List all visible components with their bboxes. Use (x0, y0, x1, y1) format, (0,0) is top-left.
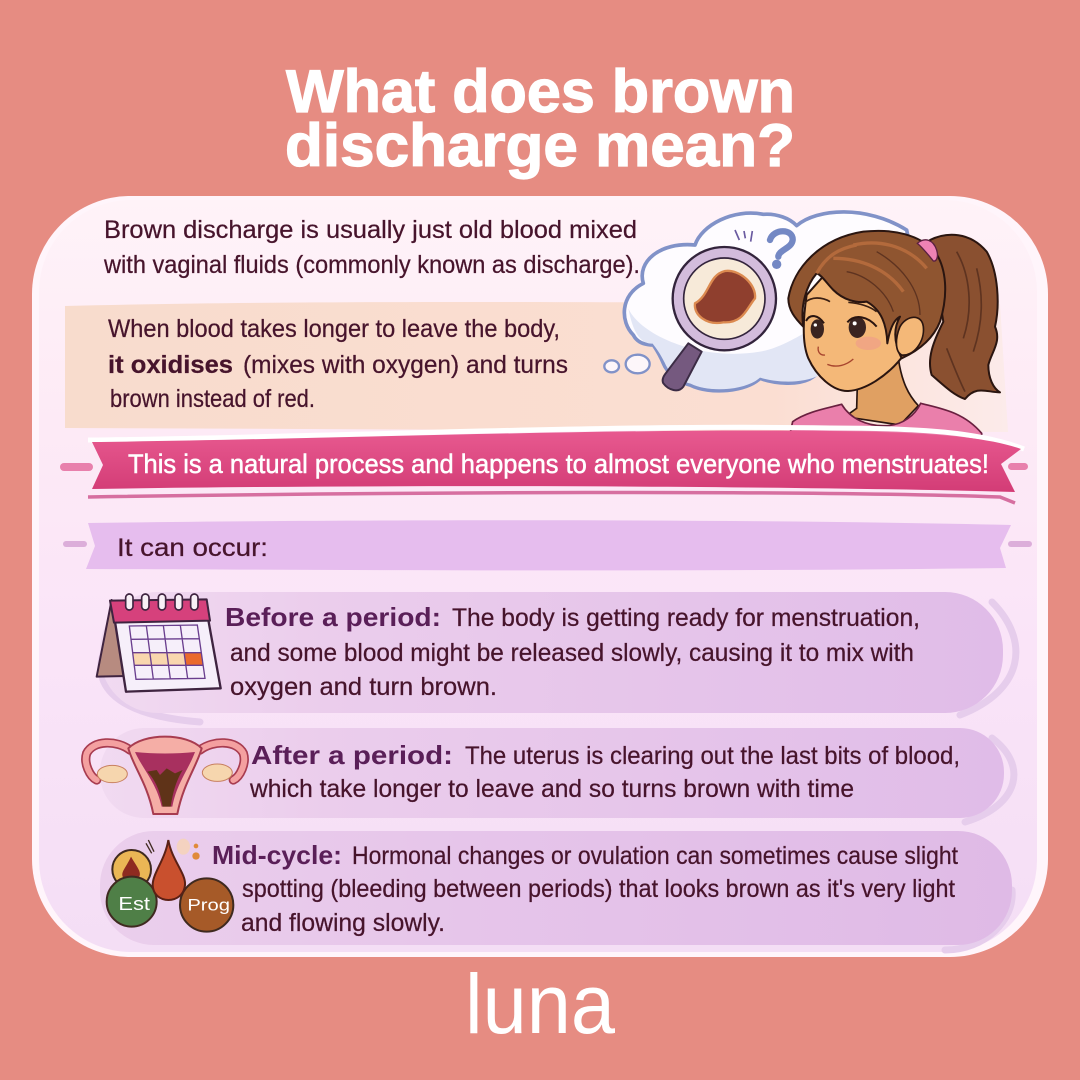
before a period text: and some blood might be released slowly, causing it to mix with (230, 639, 914, 667)
oxidation text: brown instead of red. (110, 385, 315, 413)
ear (896, 317, 923, 355)
mid-cycle text: and flowing slowly. (241, 909, 445, 937)
mid-cycle text: spotting (bleeding between periods) that looks brown as it's very light (242, 875, 955, 903)
row: after a period (86, 728, 1004, 818)
ponytail (930, 235, 1000, 399)
intro text (103, 216, 640, 279)
oxidation text: When blood takes longer to leave the body, (108, 315, 560, 343)
row: before a period (97, 592, 1003, 713)
shirt (787, 403, 982, 448)
eyes (811, 319, 824, 339)
section header: it can occur (63, 520, 1032, 570)
row crescents (101, 602, 1016, 950)
cheek and smile (856, 337, 881, 350)
icon: uterus (86, 737, 244, 814)
before a period text: Before a period: (225, 602, 441, 632)
before a period text: oxygen and turn brown. (230, 673, 497, 701)
thought cloud (604, 212, 920, 391)
mid-cycle text (212, 840, 958, 937)
face (804, 265, 915, 391)
mid-cycle text: Mid-cycle: (212, 840, 342, 870)
title: discharge mean? (285, 112, 795, 179)
question mark (735, 230, 793, 269)
hair (788, 231, 945, 358)
after a period text: which take longer to leave and so turns brown with time (249, 775, 854, 803)
oxidation text (108, 315, 568, 413)
after a period text (249, 740, 960, 803)
intro text: Brown discharge is usually just old blood mixed (104, 216, 637, 244)
header text: It can occur: (117, 534, 268, 562)
before a period text (225, 602, 920, 701)
icon: hormones (107, 839, 233, 932)
scrunchie (917, 240, 937, 261)
row: mid-cycle (100, 831, 1012, 945)
banner: natural process (60, 427, 1028, 503)
banner text: This is a natural process and happens to almost everyone who menstruates! (128, 449, 989, 479)
illustration: thought cloud, magnifier and girl (604, 212, 1000, 448)
banner end tabs (60, 463, 1028, 471)
panel: infographic card (32, 196, 1048, 957)
mid-cycle text: Hormonal changes or ovulation can sometimes cause slight (352, 842, 958, 870)
after a period text: After a period: (251, 740, 453, 770)
after a period text: The uterus is clearing out the last bits of blood, (465, 742, 960, 770)
before a period text: The body is getting ready for menstruation, (452, 604, 920, 632)
title (285, 58, 795, 179)
neck (845, 358, 918, 425)
logo: luna: luna (465, 957, 615, 1051)
oxidation text: it oxidises (108, 351, 233, 379)
girl (787, 231, 1000, 448)
title: What does brown (286, 58, 795, 125)
intro text: with vaginal fluids (commonly known as discharge). (103, 251, 640, 279)
icon: hormones: Est (118, 893, 151, 914)
icon: calendar (97, 594, 221, 692)
icon: hormones: Prog (187, 896, 230, 915)
magnifying glass (663, 247, 776, 390)
peach explanation band (65, 302, 1008, 432)
oxidation text: (mixes with oxygen) and turns (243, 351, 568, 379)
